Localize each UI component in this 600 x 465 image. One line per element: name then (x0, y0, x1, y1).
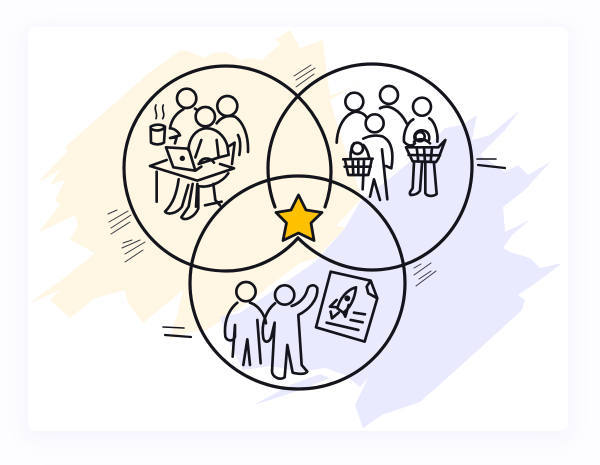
circle: bottom (190, 176, 405, 389)
circle: left (124, 66, 331, 271)
lavender brush stroke (220, 110, 562, 428)
yellow brush stroke (30, 30, 365, 340)
motion marks (108, 65, 505, 337)
lavender brush streak (254, 374, 330, 405)
team at desk icon (150, 89, 248, 219)
team with rocket document icon (225, 272, 377, 379)
star (276, 195, 322, 240)
shoppers with baskets icon (337, 86, 445, 200)
circle: right (268, 64, 472, 270)
card background (28, 27, 568, 431)
